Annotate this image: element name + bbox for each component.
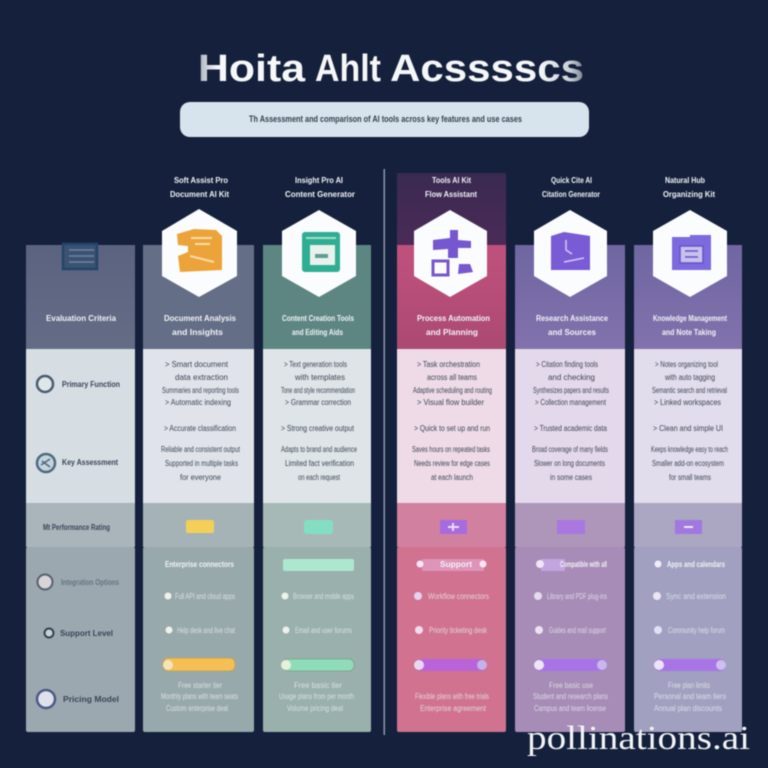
feature text: > Trusted academic data — [534, 424, 607, 433]
column heading — [542, 176, 600, 199]
panel: tool column 1 (orange) — [143, 176, 254, 732]
column heading: Citation Generator — [542, 190, 600, 199]
feature text: > Citation finding tools — [536, 360, 598, 369]
column heading — [170, 176, 229, 199]
bottom list — [653, 560, 726, 713]
bottom list: Enterprise connectors — [165, 560, 234, 569]
row item: integrations — [38, 574, 119, 590]
feature text: with templates — [294, 373, 345, 382]
header description: Research Assistance — [536, 314, 608, 323]
header description: Knowledge Management — [653, 314, 727, 323]
panel: tool column 5 (indigo) — [634, 176, 742, 732]
feature text: Semantic search and retrieval — [652, 386, 727, 395]
feature text: and checking — [548, 373, 595, 382]
bar — [283, 559, 354, 571]
title: Hoita — [198, 48, 306, 90]
feature text: > Grammar correction — [285, 398, 351, 407]
bottom list: Guides and mail support — [549, 626, 607, 635]
bottom list: Campus and team license — [534, 704, 606, 713]
bottom list: Personal and team tiers — [654, 692, 726, 701]
feature text: Keeps knowledge easy to reach — [651, 445, 728, 454]
bar — [414, 659, 487, 671]
rating chip — [557, 520, 585, 534]
bar — [536, 559, 607, 571]
feature text: > Quick to set up and run — [414, 424, 490, 433]
header description — [282, 314, 354, 337]
bottom list: Browser and mobile apps — [293, 592, 354, 601]
column heading: Tools AI Kit — [432, 176, 471, 185]
header description — [164, 314, 237, 337]
panel: tool column 4 (violet) — [515, 176, 625, 732]
bottom list — [533, 559, 608, 713]
row item: integrations: Integration Options — [61, 578, 119, 587]
feature text: on each request — [298, 473, 341, 482]
feature text: > Linked workspaces — [654, 398, 721, 407]
feature text: with auto tagging — [664, 373, 715, 382]
feature text — [161, 360, 241, 482]
column heading: Organizing Kit — [663, 190, 715, 199]
row item: features — [37, 454, 118, 472]
feature text: > Smart document — [165, 360, 229, 369]
column heading: Quick Cite AI — [551, 176, 592, 185]
feature text: > Notes organizing tool — [655, 360, 718, 369]
icon: orange hexagon — [162, 209, 237, 297]
row item: support: Support Level — [60, 629, 113, 638]
bottom list — [279, 559, 354, 713]
feature text: Broad coverage of many fields — [532, 445, 608, 454]
icon: document list — [63, 244, 97, 269]
bottom list: Free starter tier — [178, 681, 222, 690]
feature text: Limited fact verification — [285, 459, 354, 468]
header description: and Insights — [172, 328, 224, 337]
feature text: Needs review for edge cases — [414, 459, 490, 468]
header description — [653, 314, 727, 337]
bottom list: Workflow connectors — [428, 592, 489, 601]
rating chip — [304, 520, 333, 534]
feature text: for everyone — [180, 473, 222, 482]
bottom list: Community help forum — [668, 626, 725, 635]
feature text: Supported in multiple tasks — [165, 459, 238, 468]
header description: Content Creation Tools — [282, 314, 354, 323]
column heading — [425, 176, 477, 199]
bottom list: Sync and extension — [666, 592, 726, 601]
feature text: > Text generation tools — [284, 360, 347, 369]
bar — [654, 659, 726, 671]
column heading: Document AI Kit — [170, 190, 229, 199]
row item: pricing — [37, 690, 119, 708]
column heading: Content Generator — [285, 190, 355, 199]
column heading: Natural Hub — [665, 176, 705, 185]
bottom list: Help desk and live chat — [177, 626, 236, 635]
feature text: Synthesizes papers and results — [533, 386, 609, 395]
bottom list: Usage plans from per month — [279, 692, 354, 701]
bottom list: Flexible plans with free trials — [415, 692, 489, 701]
panel: tool column 3 (pink) — [397, 173, 506, 732]
column heading — [285, 176, 355, 199]
row item: purpose: Primary Function — [62, 380, 120, 389]
feature text: in some cases — [550, 473, 592, 482]
title: Acsssscs — [390, 48, 584, 90]
feature text: > Accurate classification — [164, 424, 236, 433]
subtitle banner: Th Assessment and comparison of AI tools across key features and use cases — [249, 114, 522, 124]
panel: tool column 2 (green) — [263, 176, 371, 732]
feature text — [651, 360, 728, 482]
bottom list: Volume pricing deal — [287, 704, 343, 713]
rating chip — [186, 520, 214, 533]
column heading: Soft Assist Pro — [174, 176, 228, 185]
feature text: > Strong creative output — [281, 424, 355, 433]
watermark: pollinations.ai — [527, 720, 750, 757]
bar: Support — [440, 560, 472, 569]
header description: and Editing Aids — [292, 328, 343, 337]
row item: pricing: Pricing Model — [63, 695, 119, 704]
bottom list: Monthly plans with team seats — [161, 692, 238, 701]
feature text: Adapts to brand and audience — [281, 445, 357, 454]
bottom list: Email and user forums — [295, 626, 352, 635]
feature text: Summaries and reporting tools — [162, 386, 239, 395]
bottom list: Library and PDF plug-ins — [547, 592, 607, 601]
feature text: at each launch — [431, 473, 473, 482]
header description: and Sources — [548, 328, 597, 337]
feature text: Adaptive scheduling and routing — [413, 386, 492, 395]
column heading: Flow Assistant — [425, 190, 477, 199]
subtitle banner — [180, 102, 589, 137]
feature text: data extraction — [175, 373, 228, 382]
bar — [163, 658, 235, 671]
rating chip — [440, 520, 467, 534]
header description: Document Analysis — [164, 314, 237, 323]
feature text: Slower on long documents — [534, 459, 605, 468]
icon: purple hexagon — [414, 210, 487, 297]
bar — [534, 659, 607, 671]
header description: Process Automation — [417, 314, 490, 323]
bottom list: Priority ticketing desk — [429, 626, 488, 635]
bottom list: Custom enterprise deal — [166, 704, 228, 713]
icon: indigo hexagon — [653, 210, 727, 297]
row item: features: Key Assessment — [62, 458, 118, 467]
row item: purpose — [37, 376, 120, 392]
header description: and Note Taking — [662, 328, 716, 337]
panel: row labels column — [26, 244, 135, 732]
vertical divider — [384, 169, 385, 735]
feature text — [412, 360, 492, 482]
header description: and Planning — [426, 328, 478, 337]
bottom list — [161, 560, 238, 713]
icon: green hexagon — [282, 210, 356, 297]
feature text: Smaller add-on ecosystem — [652, 459, 724, 468]
bottom list: Free plan limits — [668, 681, 710, 690]
bottom list: Student and research plans — [533, 692, 608, 701]
feature text: for small teams — [669, 473, 711, 482]
icon: violet hexagon — [534, 210, 607, 297]
feature text: Tone and style recommendation — [281, 386, 355, 395]
bar — [416, 559, 486, 571]
bottom list: Apps and calendars — [667, 560, 725, 569]
feature text: Reliable and consistent output — [161, 445, 241, 454]
feature text: > Visual flow builder — [417, 398, 484, 407]
bar: Compatible with all — [560, 560, 607, 569]
feature text: > Task orchestration — [417, 360, 480, 369]
bottom list: Full API and cloud apps — [175, 592, 235, 601]
feature text: across all teams — [427, 373, 477, 382]
row item: rating: Mt Performance Rating — [43, 523, 110, 532]
feature text: > Collection management — [535, 398, 607, 407]
title: Ahlt — [315, 48, 381, 90]
bottom list: Free basic use — [549, 681, 593, 690]
header description — [417, 314, 490, 337]
bar — [281, 659, 354, 671]
header description — [536, 314, 608, 337]
feature text — [532, 360, 609, 482]
feature text: > Clean and simple UI — [653, 424, 723, 433]
title — [198, 48, 584, 90]
feature text: Saves hours on repeated tasks — [412, 445, 490, 454]
feature text — [281, 360, 357, 482]
feature text: > Automatic indexing — [165, 398, 231, 407]
bottom list: Free basic tier — [294, 681, 342, 690]
bottom list: Annual plan discounts — [654, 704, 722, 713]
bottom list — [414, 559, 489, 713]
rating chip — [675, 520, 702, 534]
bottom list: Enterprise agreement — [420, 704, 487, 713]
column heading — [663, 176, 715, 199]
column heading: Insight Pro AI — [295, 176, 343, 185]
row label: header: Evaluation Criteria — [46, 314, 117, 323]
